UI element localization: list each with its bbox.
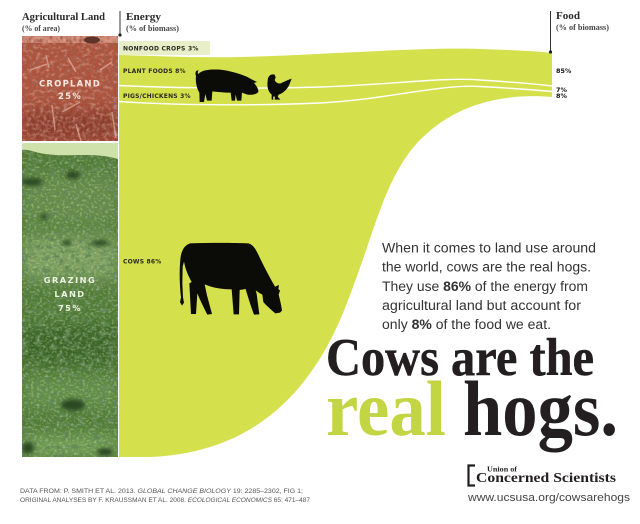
food percentages: 8% (556, 92, 567, 100)
heading: energy: Energy (126, 12, 162, 23)
logo: Union of Concerned Scientists (468, 464, 617, 486)
icon: chicken (267, 74, 292, 100)
text block: explanation (382, 240, 596, 332)
heading: food: Food (556, 11, 580, 22)
heading: agricultural land: (% of area) (22, 24, 60, 33)
icon: pig (195, 69, 258, 102)
logo: Union of Concerned Scientists: Concerned Scientists (476, 471, 617, 486)
chart: energy to food flow (119, 49, 552, 457)
text block: explanation: When it comes to land use around (382, 240, 596, 256)
logo: Union of Concerned Scientists: Union of (487, 464, 518, 474)
label: grazing land (44, 275, 96, 313)
band: nonfood crops: NONFOOD CROPS 3% (123, 46, 199, 52)
title: real (326, 365, 446, 452)
text block: explanation: the world, cows are the real hogs. (382, 260, 591, 274)
food percentages: 85% (556, 67, 572, 75)
title: hogs. (463, 365, 618, 452)
flow dividers (119, 79, 552, 105)
food percentages (556, 67, 572, 100)
label: cropland: CROPLAND (39, 80, 101, 90)
label: grazing land: LAND (54, 289, 86, 299)
text block: explanation: They use 86% of the energy from (382, 279, 588, 294)
heading: food: (% of biomass) (556, 23, 609, 32)
label: cows: COWS 86% (123, 258, 162, 266)
food percentages: 7% (556, 86, 567, 94)
label: pigs and chickens: PIGS/CHICKENS 3% (123, 93, 191, 100)
label: plant foods: PLANT FOODS 8% (123, 68, 186, 75)
icon: cow (180, 243, 282, 315)
text block: explanation: only 8% of the food we eat. (382, 317, 551, 332)
heading: agricultural land (22, 12, 105, 33)
arrow: energy marker (118, 11, 122, 37)
text block: explanation: agricultural land but account for (382, 298, 582, 313)
data source note: DATA FROM: P. SMITH ET AL. 2013. GLOBAL CHANGE BIOLOGY 19: 2285–2302, FIG 1; (20, 488, 303, 495)
arrow: food marker (549, 11, 552, 54)
heading: energy: (% of biomass) (126, 24, 179, 33)
data source note: ORIGINAL ANALYSES BY F. KRAUSSMAN ET AL. 2008. ECOLOGICAL ECONOMICS 65: 471–487 (20, 497, 311, 504)
label: grazing land: GRAZING (44, 275, 96, 285)
panel: grazing land photo (21, 143, 118, 457)
data source note (20, 488, 311, 504)
panel: cropland photo (22, 36, 118, 141)
heading: food (556, 11, 609, 32)
website url: www.ucsusa.org/cowsarehogs (467, 492, 631, 504)
band: nonfood crops (119, 41, 210, 55)
heading: agricultural land: Agricultural Land (22, 12, 105, 23)
label: grazing land: 75% (58, 303, 82, 313)
heading: energy (126, 12, 179, 33)
label: cropland: 25% (58, 92, 82, 102)
title: Cows are the (326, 329, 594, 387)
title (326, 329, 618, 452)
label: cropland (39, 80, 101, 102)
